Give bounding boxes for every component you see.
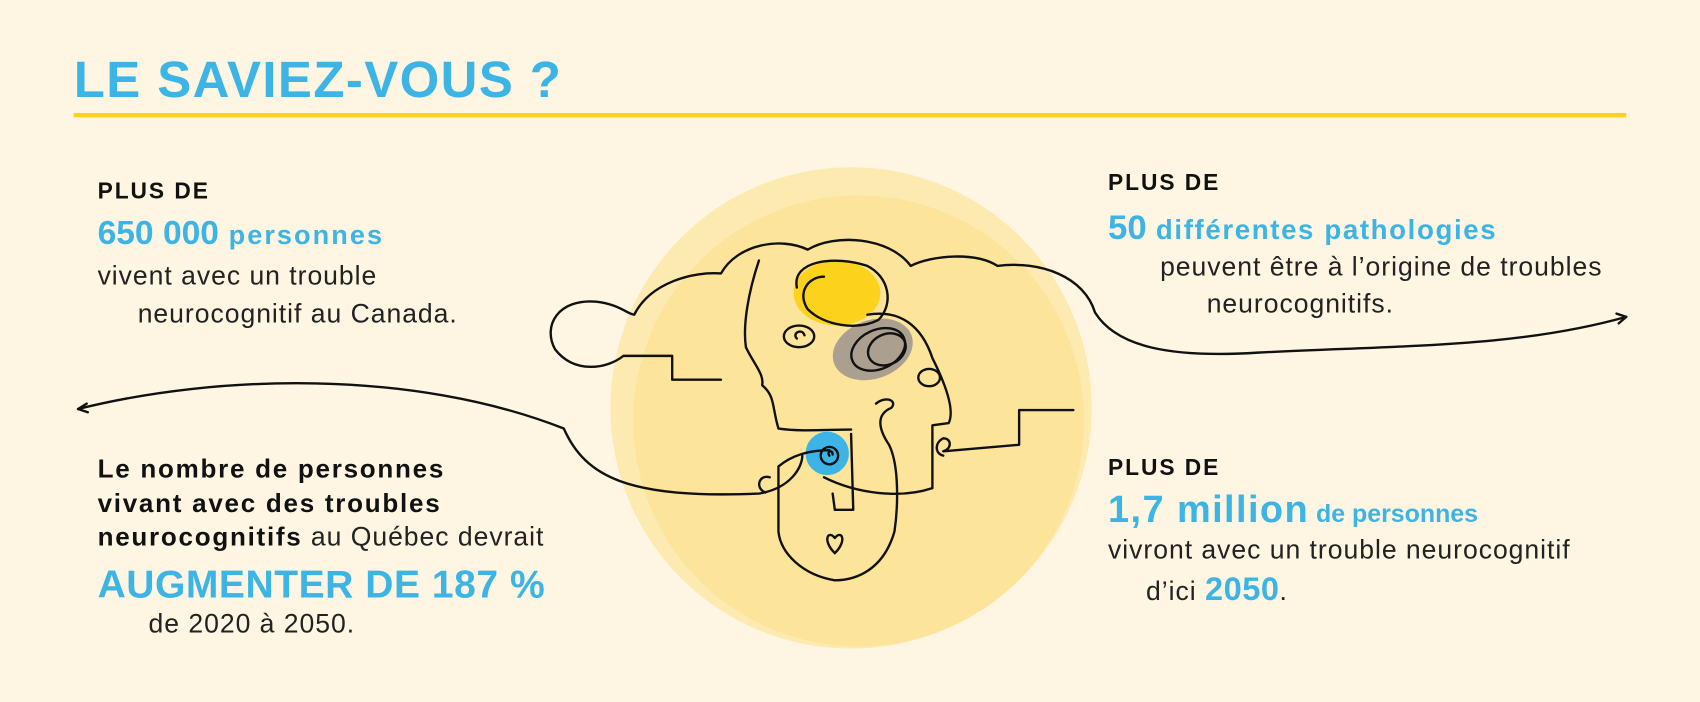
stat: 50 pathologies: 50 différentes pathologies xyxy=(1108,209,1497,247)
color spots xyxy=(794,260,921,475)
title: LE SAVIEZ-VOUS ? xyxy=(74,51,562,108)
stat: 50 pathologies xyxy=(1108,169,1603,319)
stat: 650 000 xyxy=(98,178,458,328)
stat: augmenter 187 % xyxy=(98,453,545,638)
stat: augmenter 187 %: vivant avec des troubles xyxy=(98,488,441,518)
stat: 1,7 million: PLUS DE xyxy=(1108,454,1220,480)
stat: 650 000: vivent avec un trouble xyxy=(98,260,377,290)
stat: 650 000: PLUS DE xyxy=(98,178,210,204)
stat: 1,7 million: 1,7 million de personnes xyxy=(1108,489,1478,531)
stat: 1,7 million: d’ici 2050. xyxy=(1146,571,1288,607)
stat: augmenter 187 %: neurocognitifs au Québec devrait xyxy=(98,522,544,552)
stat: 50 pathologies: neurocognitifs. xyxy=(1207,289,1394,319)
stat: augmenter 187 %: de 2020 à 2050. xyxy=(149,608,355,638)
stat: 50 pathologies: PLUS DE xyxy=(1108,169,1220,195)
stat: augmenter 187 %: Le nombre de personnes xyxy=(98,453,445,483)
stat: 650 000: neurocognitif au Canada. xyxy=(138,298,458,328)
stat: 650 000: 650 000 personnes xyxy=(98,215,384,252)
stat: 50 pathologies: peuvent être à l’origine de troubles xyxy=(1160,252,1603,282)
stat: 1,7 million: vivront avec un trouble neurocognitif xyxy=(1108,535,1571,565)
stat: augmenter 187 %: AUGMENTER DE 187 % xyxy=(98,564,545,607)
stat: 1,7 million xyxy=(1108,454,1571,607)
background circles xyxy=(610,167,1092,649)
line drawing: faces and clouds with arrows xyxy=(78,240,1626,580)
